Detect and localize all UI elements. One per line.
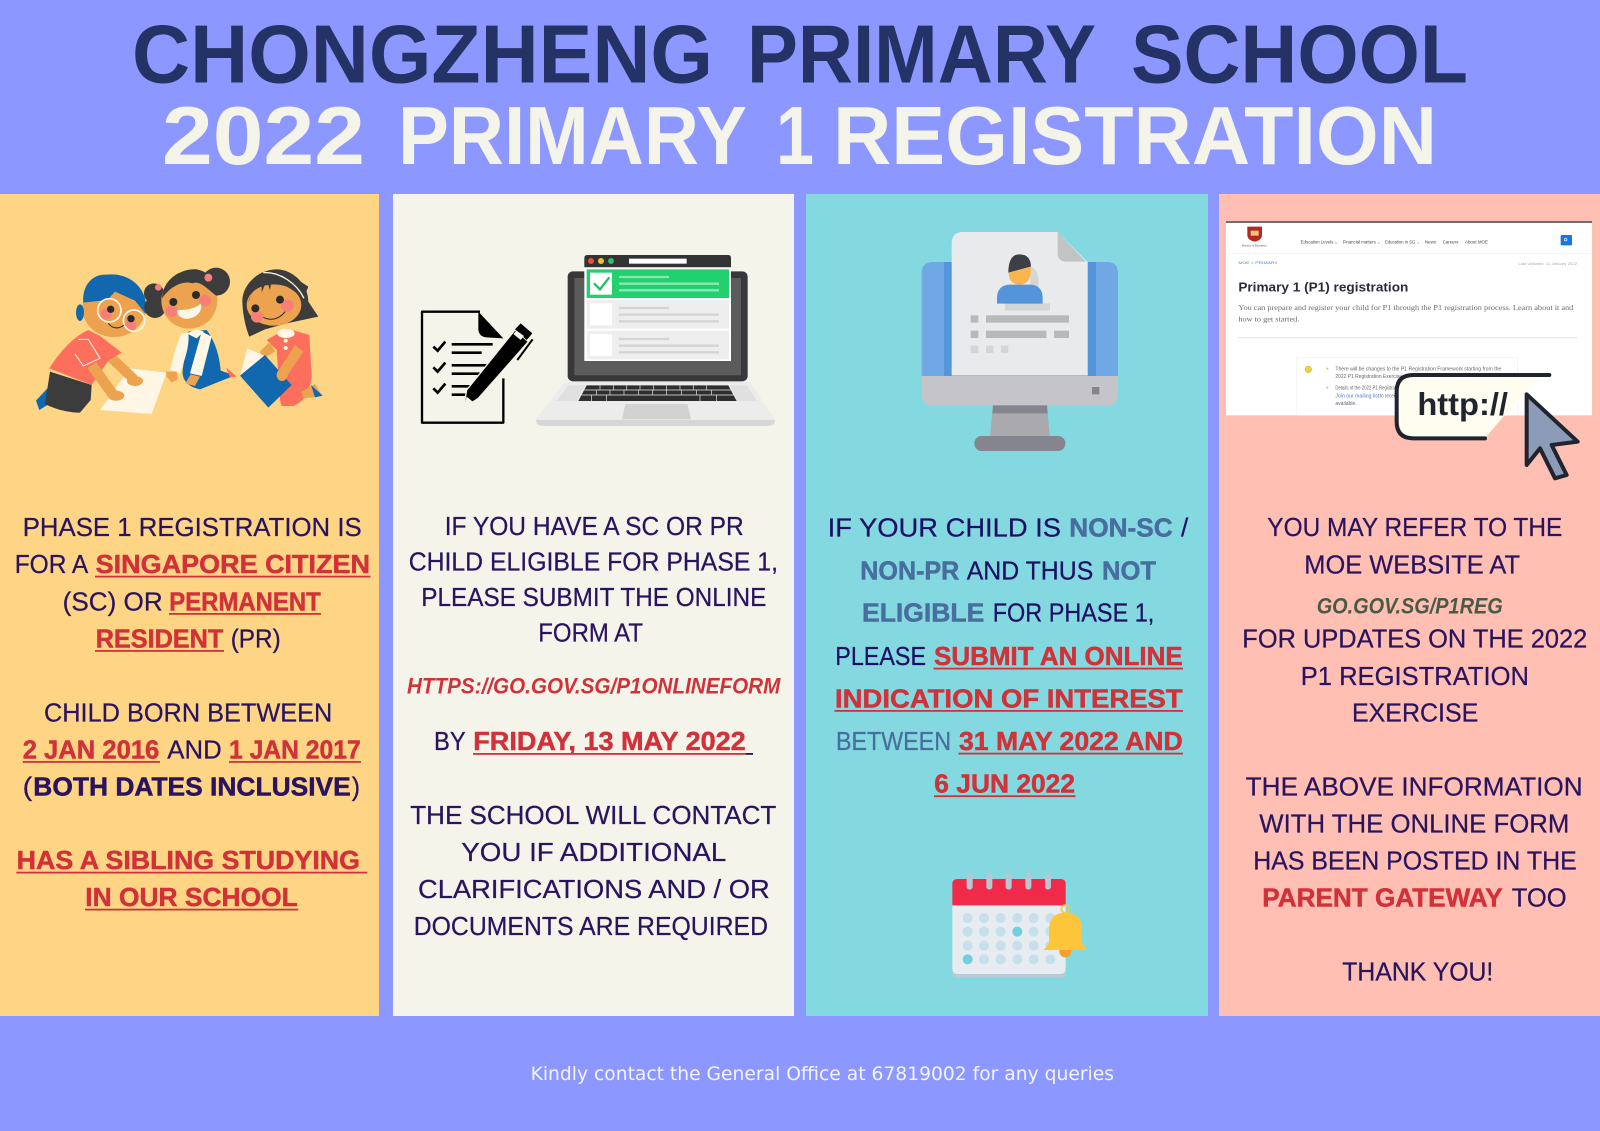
text: phase 1 criteria: RESIDENT (96, 624, 223, 654)
text: online form instructions: HTTPS://GO.GOV.SG/P1ONLINEFORM (407, 673, 781, 698)
text: non-SC / non-PR instructions: IF YOUR CHILD IS (828, 513, 1061, 543)
text: online form instructions: DOCUMENTS ARE REQUIRED (414, 911, 768, 941)
text: MOE website reference: WITH THE ONLINE FORM (1259, 809, 1569, 839)
icon: calendar with bell (952, 876, 1088, 978)
screenshot: MOE P1 registration web page: MOE > PRIMARY (1238, 261, 1279, 265)
text: phase 1 criteria: BOTH DATES INCLUSIVE (33, 772, 351, 802)
screenshot: MOE P1 registration web page: 2022 P1 Registration Exercise (1335, 374, 1402, 380)
text: MOE website reference: HAS BEEN POSTED IN THE (1253, 845, 1577, 875)
icon: laptop with online form (536, 255, 775, 426)
footer contact note: Kindly contact the General Office at 67819002 for any queries (531, 1063, 1114, 1085)
text: phase 1 criteria (15, 512, 370, 912)
text: non-SC / non-PR instructions: 31 MAY 2022 AND (959, 726, 1183, 756)
title line 2: 2022 (162, 89, 365, 182)
title line 2: REGISTRATION (833, 89, 1437, 182)
text: phase 1 criteria: SINGAPORE CITIZEN (96, 549, 370, 579)
title line 1 (132, 8, 1468, 100)
text: online form instructions: CLARIFICATIONS AND / OR (418, 874, 770, 904)
screenshot: MOE P1 registration web page (1226, 221, 1592, 415)
text: MOE website reference: THANK YOU! (1342, 957, 1493, 987)
text: MOE website reference: P1 REGISTRATION (1301, 661, 1529, 691)
icon: http bubble and cursor (1397, 375, 1578, 478)
text: phase 1 criteria: PERMANENT (169, 586, 321, 616)
text: MOE website reference (1242, 512, 1587, 987)
text: phase 1 criteria: (PR) (231, 624, 281, 654)
boy (36, 274, 167, 414)
panel: non-SC / non-PR (806, 194, 1208, 1016)
screenshot: MOE P1 registration web page: Ministry of Education (1242, 244, 1267, 248)
text: non-SC / non-PR instructions: NON-PR (860, 555, 960, 585)
text: MOE website reference: PARENT GATEWAY (1262, 883, 1503, 913)
text: non-SC / non-PR instructions: NON-SC (1069, 513, 1173, 543)
text: online form instructions: BY (434, 726, 466, 756)
screenshot: MOE P1 registration web page: You can prepare and register your child for P1 through the P1 registration process. Learn about it and (1238, 303, 1574, 312)
text: phase 1 criteria: CHILD BORN BETWEEN (44, 698, 332, 728)
text: phase 1 criteria: HAS A SIBLING STUDYING (17, 845, 360, 875)
text: non-SC / non-PR instructions: SUBMIT AN ONLINE (934, 641, 1183, 671)
text: MOE website reference: TOO (1512, 883, 1567, 913)
text: phase 1 criteria: (SC) OR (63, 586, 163, 616)
icon: checklist and pen (422, 312, 533, 423)
text: online form instructions: FRIDAY, 13 MAY 2022 (473, 726, 746, 756)
text: non-SC / non-PR instructions: INDICATION OF INTEREST (835, 683, 1183, 713)
icon: http bubble and cursor: http:// (1417, 387, 1508, 422)
text: online form instructions: PLEASE SUBMIT THE ONLINE (421, 582, 766, 612)
text: MOE website reference: GO.GOV.SG/P1REG (1317, 593, 1503, 618)
title (132, 8, 1468, 182)
icon: monitor with profile document (922, 232, 1118, 451)
text: phase 1 criteria: FOR A (15, 549, 89, 579)
text: phase 1 criteria: IN OUR SCHOOL (85, 882, 298, 912)
panel: phase 1 eligibility (0, 194, 379, 1016)
screenshot: MOE P1 registration web page: available. (1335, 401, 1357, 407)
text: non-SC / non-PR instructions: ELIGIBLE (862, 598, 984, 628)
screenshot: MOE P1 registration web page: Careers (1443, 239, 1458, 244)
text: non-SC / non-PR instructions: FOR PHASE 1, (993, 598, 1154, 628)
text: phase 1 criteria: PHASE 1 REGISTRATION IS (23, 512, 362, 542)
text: MOE website reference: EXERCISE (1352, 698, 1478, 728)
text: MOE website reference: YOU MAY REFER TO THE (1267, 512, 1562, 542)
text: non-SC / non-PR instructions: BETWEEN (836, 726, 951, 756)
screenshot: MOE P1 registration web page: About MOE (1465, 239, 1488, 244)
screenshot: MOE P1 registration web page: Financial matters ⌄ (1343, 239, 1381, 244)
title line 2 (162, 89, 1437, 182)
text: phase 1 criteria: ) (352, 772, 360, 802)
panel: online form (393, 194, 794, 1016)
text: non-SC / non-PR instructions: 6 JUN 2022 (934, 769, 1075, 799)
screenshot: MOE P1 registration web page: Details of the 2022 P1 Registration (1335, 385, 1402, 391)
text: online form instructions: YOU IF ADDITIONAL (461, 837, 726, 867)
icon: three children reading (36, 268, 323, 414)
text: non-SC / non-PR instructions (828, 513, 1189, 799)
text: online form instructions: IF YOU HAVE A SC OR PR (445, 511, 744, 541)
text: online form instructions (407, 511, 781, 941)
text: phase 1 criteria: AND (167, 734, 222, 764)
title line 2: PRIMARY (398, 89, 747, 182)
screenshot: MOE P1 registration web page: Education Levels ⌄ (1301, 239, 1338, 244)
text: MOE website reference: FOR UPDATES ON THE 2022 (1242, 624, 1587, 654)
screenshot: MOE P1 registration web page: Join our mailing list (1335, 393, 1380, 399)
screenshot: MOE P1 registration web page: There will be changes to the P1 Registration Framework starting from the (1335, 366, 1501, 372)
title line 1: SCHOOL (1131, 8, 1468, 100)
screenshot: MOE P1 registration web page: Last Updated: 11 January 2022 (1518, 262, 1577, 266)
text: non-SC / non-PR instructions: / (1181, 513, 1189, 543)
title line 1: CHONGZHENG (132, 8, 713, 100)
screenshot: MOE P1 registration web page: to receive (1380, 393, 1400, 399)
text: online form instructions: THE SCHOOL WILL CONTACT (410, 800, 776, 830)
girl with book (240, 269, 323, 408)
screenshot: MOE P1 registration web page: News (1425, 239, 1436, 244)
girl in blue pinafore (144, 268, 237, 389)
text: phase 1 criteria: 1 JAN 2017 (229, 734, 361, 764)
text: phase 1 criteria: 2 JAN 2016 (23, 734, 159, 764)
text: non-SC / non-PR instructions: AND THUS (967, 555, 1093, 585)
text: non-SC / non-PR instructions: PLEASE (835, 641, 926, 671)
screenshot: MOE P1 registration web page: how to get started. (1238, 315, 1300, 324)
text: MOE website reference: MOE WEBSITE AT (1304, 549, 1520, 579)
text: online form instructions: FORM AT (538, 618, 643, 648)
screenshot: MOE P1 registration web page: Primary 1 (P1) registration (1238, 281, 1408, 295)
text: MOE website reference: THE ABOVE INFORMATION (1246, 772, 1583, 802)
text: non-SC / non-PR instructions: NOT (1102, 555, 1156, 585)
screenshot: MOE P1 registration web page: Education in SG ⌄ (1385, 239, 1420, 244)
text: phase 1 criteria: ( (23, 772, 33, 802)
panel: MOE website (1219, 194, 1600, 1016)
title line 1: PRIMARY (747, 8, 1096, 100)
title line 2: 1 (776, 89, 814, 182)
text: online form instructions: CHILD ELIGIBLE FOR PHASE 1, (409, 547, 778, 577)
